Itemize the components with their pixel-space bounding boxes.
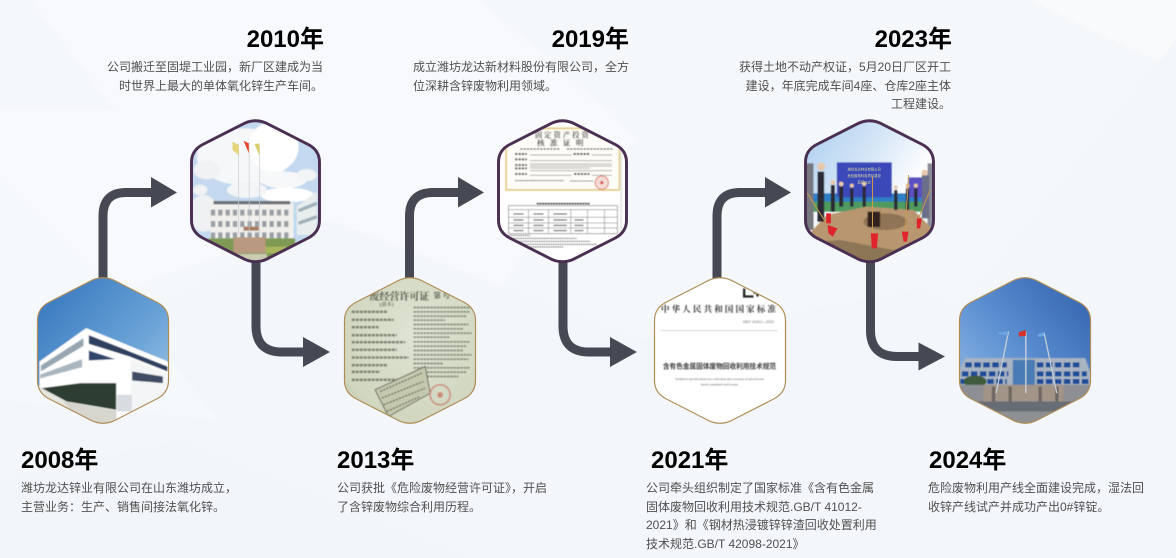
text: 2010 description: 公司搬迁至固堤工业园，新厂区建成为当 bbox=[107, 60, 323, 74]
text: 2023 description bbox=[739, 60, 951, 111]
text: 2013 description: 了含锌废物综合利用历程。 bbox=[337, 500, 481, 514]
heading: 2010: 2010年 bbox=[247, 26, 324, 53]
text: 2024 description: 收锌产线试产并成功产出0#锌锭。 bbox=[928, 500, 1109, 514]
text: 2013 description: 公司获批《危险废物经营许可证》，开启 bbox=[337, 481, 547, 495]
text: 2019 description: 成立潍坊龙达新材料股份有限公司，全方 bbox=[413, 60, 629, 74]
photo hexagon: 2023 groundbreaking ceremony: 危险废物利用项目建设 bbox=[848, 173, 881, 178]
text: 2024 description: 危险废物利用产线全面建设完成，湿法回 bbox=[928, 481, 1144, 495]
timeline graphic bbox=[36, 119, 1092, 424]
document hexagon: 2013 hazardous waste permit: 废经营许可证 bbox=[369, 290, 429, 303]
text: 2019 description bbox=[413, 60, 629, 92]
document hexagon: 2021 national standard cover: metal contained solid waste bbox=[701, 382, 738, 386]
heading: 2023: 2023年 bbox=[875, 26, 952, 53]
text: 2010 description bbox=[107, 60, 323, 92]
photo hexagon: 2008 factory building bbox=[36, 277, 170, 424]
arrow: 2010 to 2013 bbox=[256, 262, 330, 367]
document hexagon: 2013 hazardous waste permit bbox=[344, 277, 476, 424]
heading: 2013: 2013年 bbox=[337, 447, 414, 474]
arrow: 2023 to 2024 bbox=[870, 262, 945, 370]
document hexagon: 2021 national standard cover: 含有色金属固体废物回收利用技术规范 bbox=[663, 361, 776, 370]
arrow: 2021 to 2023 bbox=[717, 177, 791, 280]
photo hexagon: 2023 groundbreaking ceremony: 潍坊龙达锌业有限公司 bbox=[848, 167, 881, 172]
text: 2024 description bbox=[928, 481, 1144, 514]
document hexagon: 2021 national standard cover: 中华人民共和国国家标准 bbox=[661, 303, 778, 314]
arrow: 2008 to 2010 bbox=[103, 177, 177, 280]
text: 2019 description: 位深耕含锌废物利用领域。 bbox=[413, 78, 557, 92]
text: 2021 description bbox=[646, 481, 877, 550]
document hexagon: 2013 hazardous waste permit: (副本) bbox=[379, 300, 394, 308]
text: 2021 description: 2021》和《钢材热浸镀锌锌渣回收处置利用 bbox=[646, 518, 877, 532]
document hexagon: 2021 national standard cover: GB/T 41012—2021 bbox=[743, 320, 774, 324]
document hexagon: 2013 hazardous waste permit: 第 号 bbox=[433, 291, 451, 300]
text: 2021 description: 固体废物回收利用技术规范.GB/T 41012- bbox=[646, 500, 862, 514]
text: 2023 description: 获得土地不动产权证，5月20日厂区开工 bbox=[739, 60, 951, 74]
arrow: 2019 to 2021 bbox=[563, 262, 637, 367]
text: 2008 description: 主营业务：生产、销售间接法氧化锌。 bbox=[21, 500, 225, 514]
document hexagon: 2021 national standard cover: Technical specifications for collection and recovery of non-ferrous bbox=[675, 377, 765, 381]
heading: 2019: 2019年 bbox=[552, 26, 629, 53]
text: 2013 description bbox=[337, 481, 547, 514]
arrow: 2013 to 2019 bbox=[410, 177, 484, 280]
text: 2010 description: 时世界上最大的单体氧化锌生产车间。 bbox=[119, 78, 323, 92]
text: 2008 description: 潍坊龙达锌业有限公司在山东潍坊成立， bbox=[21, 481, 237, 495]
photo hexagon: 2024 office building with flags bbox=[958, 277, 1092, 424]
photo hexagon: 2023 groundbreaking ceremony bbox=[804, 119, 935, 264]
document hexagon: 2019 fixed asset approval certificate: 固定资产投资 bbox=[535, 130, 591, 139]
heading: 2024: 2024年 bbox=[929, 447, 1006, 474]
text: 2023 description: 建设，年底完成车间4座、仓库2座主体 bbox=[746, 78, 951, 92]
heading: 2021: 2021年 bbox=[651, 447, 728, 474]
document hexagon: 2021 national standard cover bbox=[654, 277, 786, 424]
document hexagon: 2019 fixed asset approval certificate: 核准证明 bbox=[537, 137, 589, 147]
text: 2021 description: 公司牵头组织制定了国家标准《含有色金属 bbox=[646, 481, 874, 495]
heading: 2008: 2008年 bbox=[21, 447, 98, 474]
document hexagon: 2019 fixed asset approval certificate bbox=[497, 119, 628, 264]
text: 2021 description: 技术规范.GB/T 42098-2021》 bbox=[646, 536, 805, 550]
photo hexagon: 2010 new plant with flags bbox=[187, 113, 323, 267]
text: 2008 description bbox=[21, 481, 237, 514]
text: 2023 description: 工程建设。 bbox=[891, 97, 951, 111]
photo hexagon: 2023 groundbreaking ceremony: 奠基仪式 bbox=[858, 180, 871, 185]
